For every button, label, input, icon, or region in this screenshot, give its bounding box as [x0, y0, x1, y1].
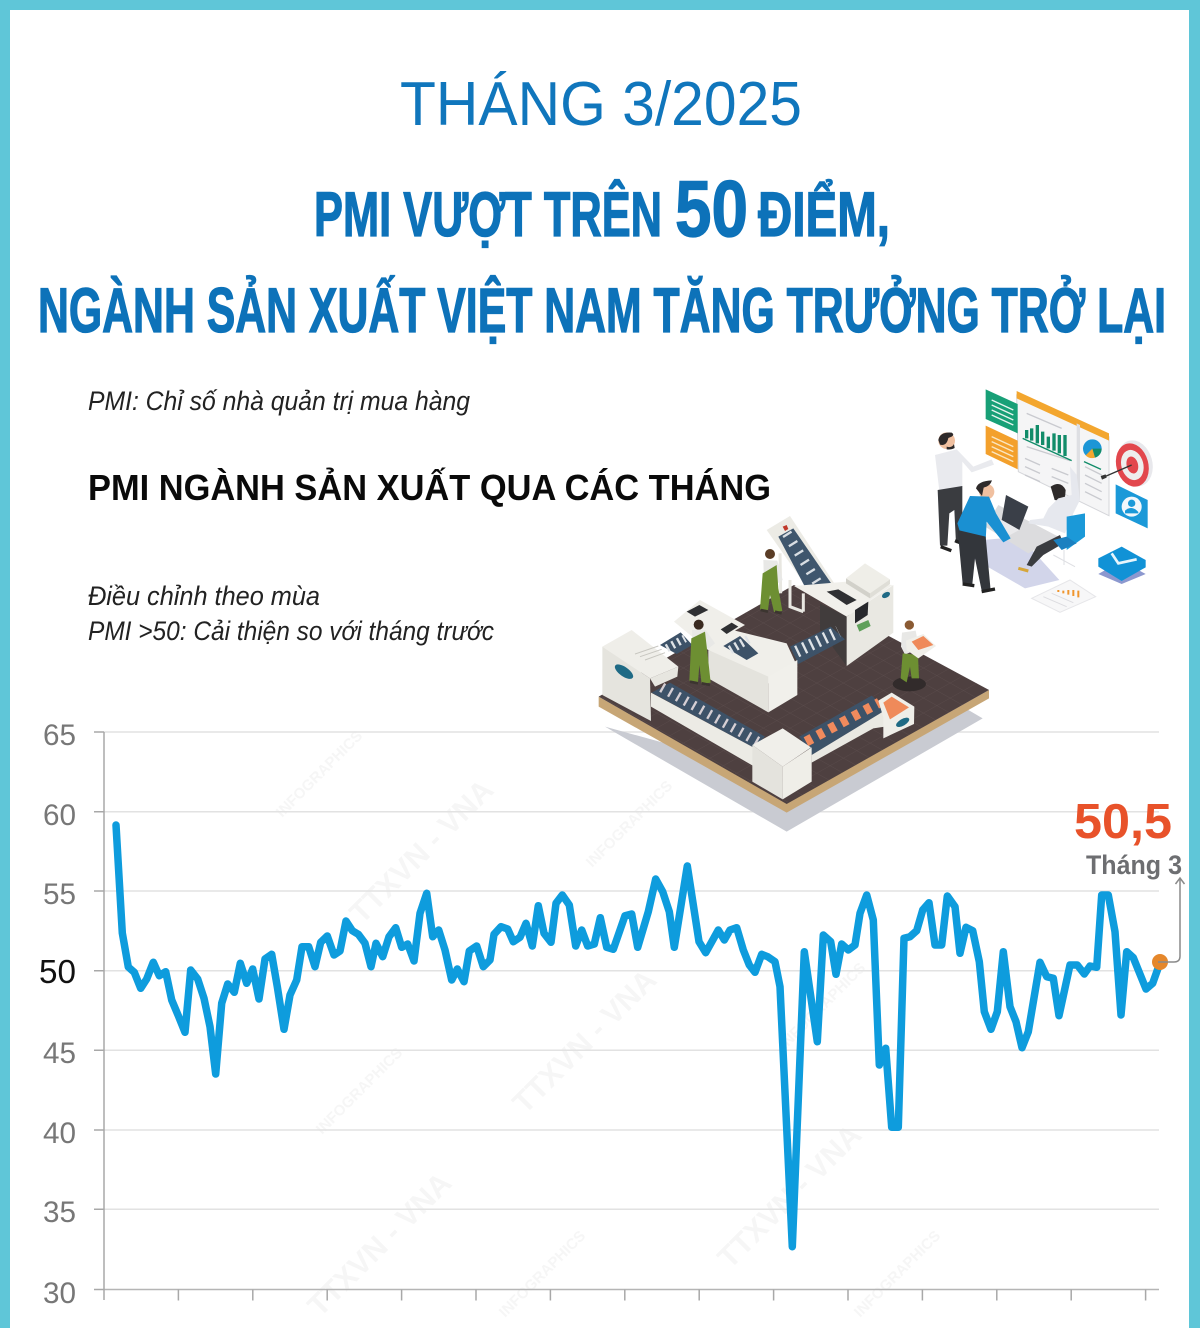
chart notes: [88, 581, 494, 646]
watermarks: INFOGRAPHICS: [496, 1227, 589, 1321]
tilted conveyor: [767, 516, 836, 612]
watermarks: TTXVN - VNA: [302, 1166, 458, 1323]
y axis labels: 40: [43, 1117, 76, 1150]
desk and laptop: [970, 495, 1059, 588]
worker: left: [689, 620, 715, 685]
watermarks: TTXVN - VNA: [712, 1118, 868, 1275]
heading: line 1: [314, 164, 890, 253]
y axis labels: 50: [39, 953, 76, 990]
main board: [1017, 391, 1109, 516]
worker: with crate: [893, 620, 936, 691]
chart heading: PMI NGÀNH SẢN XUẤT QUA CÁC THÁNG: [88, 467, 771, 508]
latest value dot: [1152, 954, 1168, 970]
watermarks: INFOGRAPHICS: [583, 777, 676, 871]
person: standing presenter: [935, 432, 994, 551]
chart notes: Điều chỉnh theo mùa: [88, 581, 320, 611]
heading: line 1: 50: [675, 164, 748, 253]
watermarks: INFOGRAPHICS: [313, 1044, 406, 1138]
y axis labels: 60: [43, 799, 76, 832]
chart gridlines and axes: [94, 732, 1159, 1300]
illustration: business team: [935, 389, 1158, 612]
watermarks: INFOGRAPHICS: [851, 1227, 944, 1321]
watermarks: INFOGRAPHICS: [273, 727, 366, 821]
report sheet: [1032, 580, 1096, 612]
month label: Tháng 3: [1086, 850, 1182, 880]
watermarks: [273, 727, 944, 1323]
heading: line 1: PMI VƯỢT TRÊN: [314, 179, 662, 250]
value label: 50,5: [1074, 795, 1172, 849]
watermarks: INFOGRAPHICS: [776, 959, 869, 1053]
chart notes: PMI >50: Cải thiện so với tháng trước: [88, 616, 494, 646]
illustration: factory floor: [599, 516, 989, 832]
worker: top: [760, 549, 783, 613]
y axis labels: 65: [43, 719, 76, 752]
watermarks: TTXVN - VNA: [344, 773, 500, 930]
watermarks: TTXVN - VNA: [507, 963, 663, 1120]
callout: latest value: [1074, 795, 1184, 970]
y axis labels: 30: [43, 1277, 76, 1310]
person: blue sweater: [957, 480, 1011, 592]
center conveyor: [790, 627, 845, 664]
orange conveyor: [799, 696, 887, 763]
left machine: [602, 630, 678, 721]
platform edge: [599, 690, 989, 813]
green note: [986, 389, 1018, 433]
blue conveyor: [651, 683, 765, 766]
y axis labels: 55: [43, 878, 76, 911]
heading: line 1: ĐIỂM,: [758, 179, 890, 250]
y axis labels: 45: [43, 1037, 76, 1070]
check badge: [1098, 547, 1146, 584]
platform floor: [599, 585, 989, 804]
heading: month: THÁNG 3/2025: [400, 70, 802, 139]
definition note: PMI: Chỉ số nhà quản trị mua hàng: [88, 386, 470, 416]
target: [1101, 436, 1158, 490]
center machine: [660, 600, 797, 712]
front machine: [752, 728, 812, 799]
person: seated man: [1018, 467, 1085, 571]
user card: [1116, 484, 1148, 528]
y axis labels: 35: [43, 1196, 76, 1229]
y axis labels: [39, 719, 76, 1310]
connector arrow: [1158, 878, 1184, 962]
salmon crate: [878, 693, 914, 738]
floor shadow: [605, 709, 983, 832]
title: [38, 70, 1166, 346]
floor tiles: [599, 585, 989, 804]
right machine: [794, 563, 893, 666]
line chart: PMI series: [116, 825, 1160, 1247]
orange note: [986, 426, 1018, 469]
